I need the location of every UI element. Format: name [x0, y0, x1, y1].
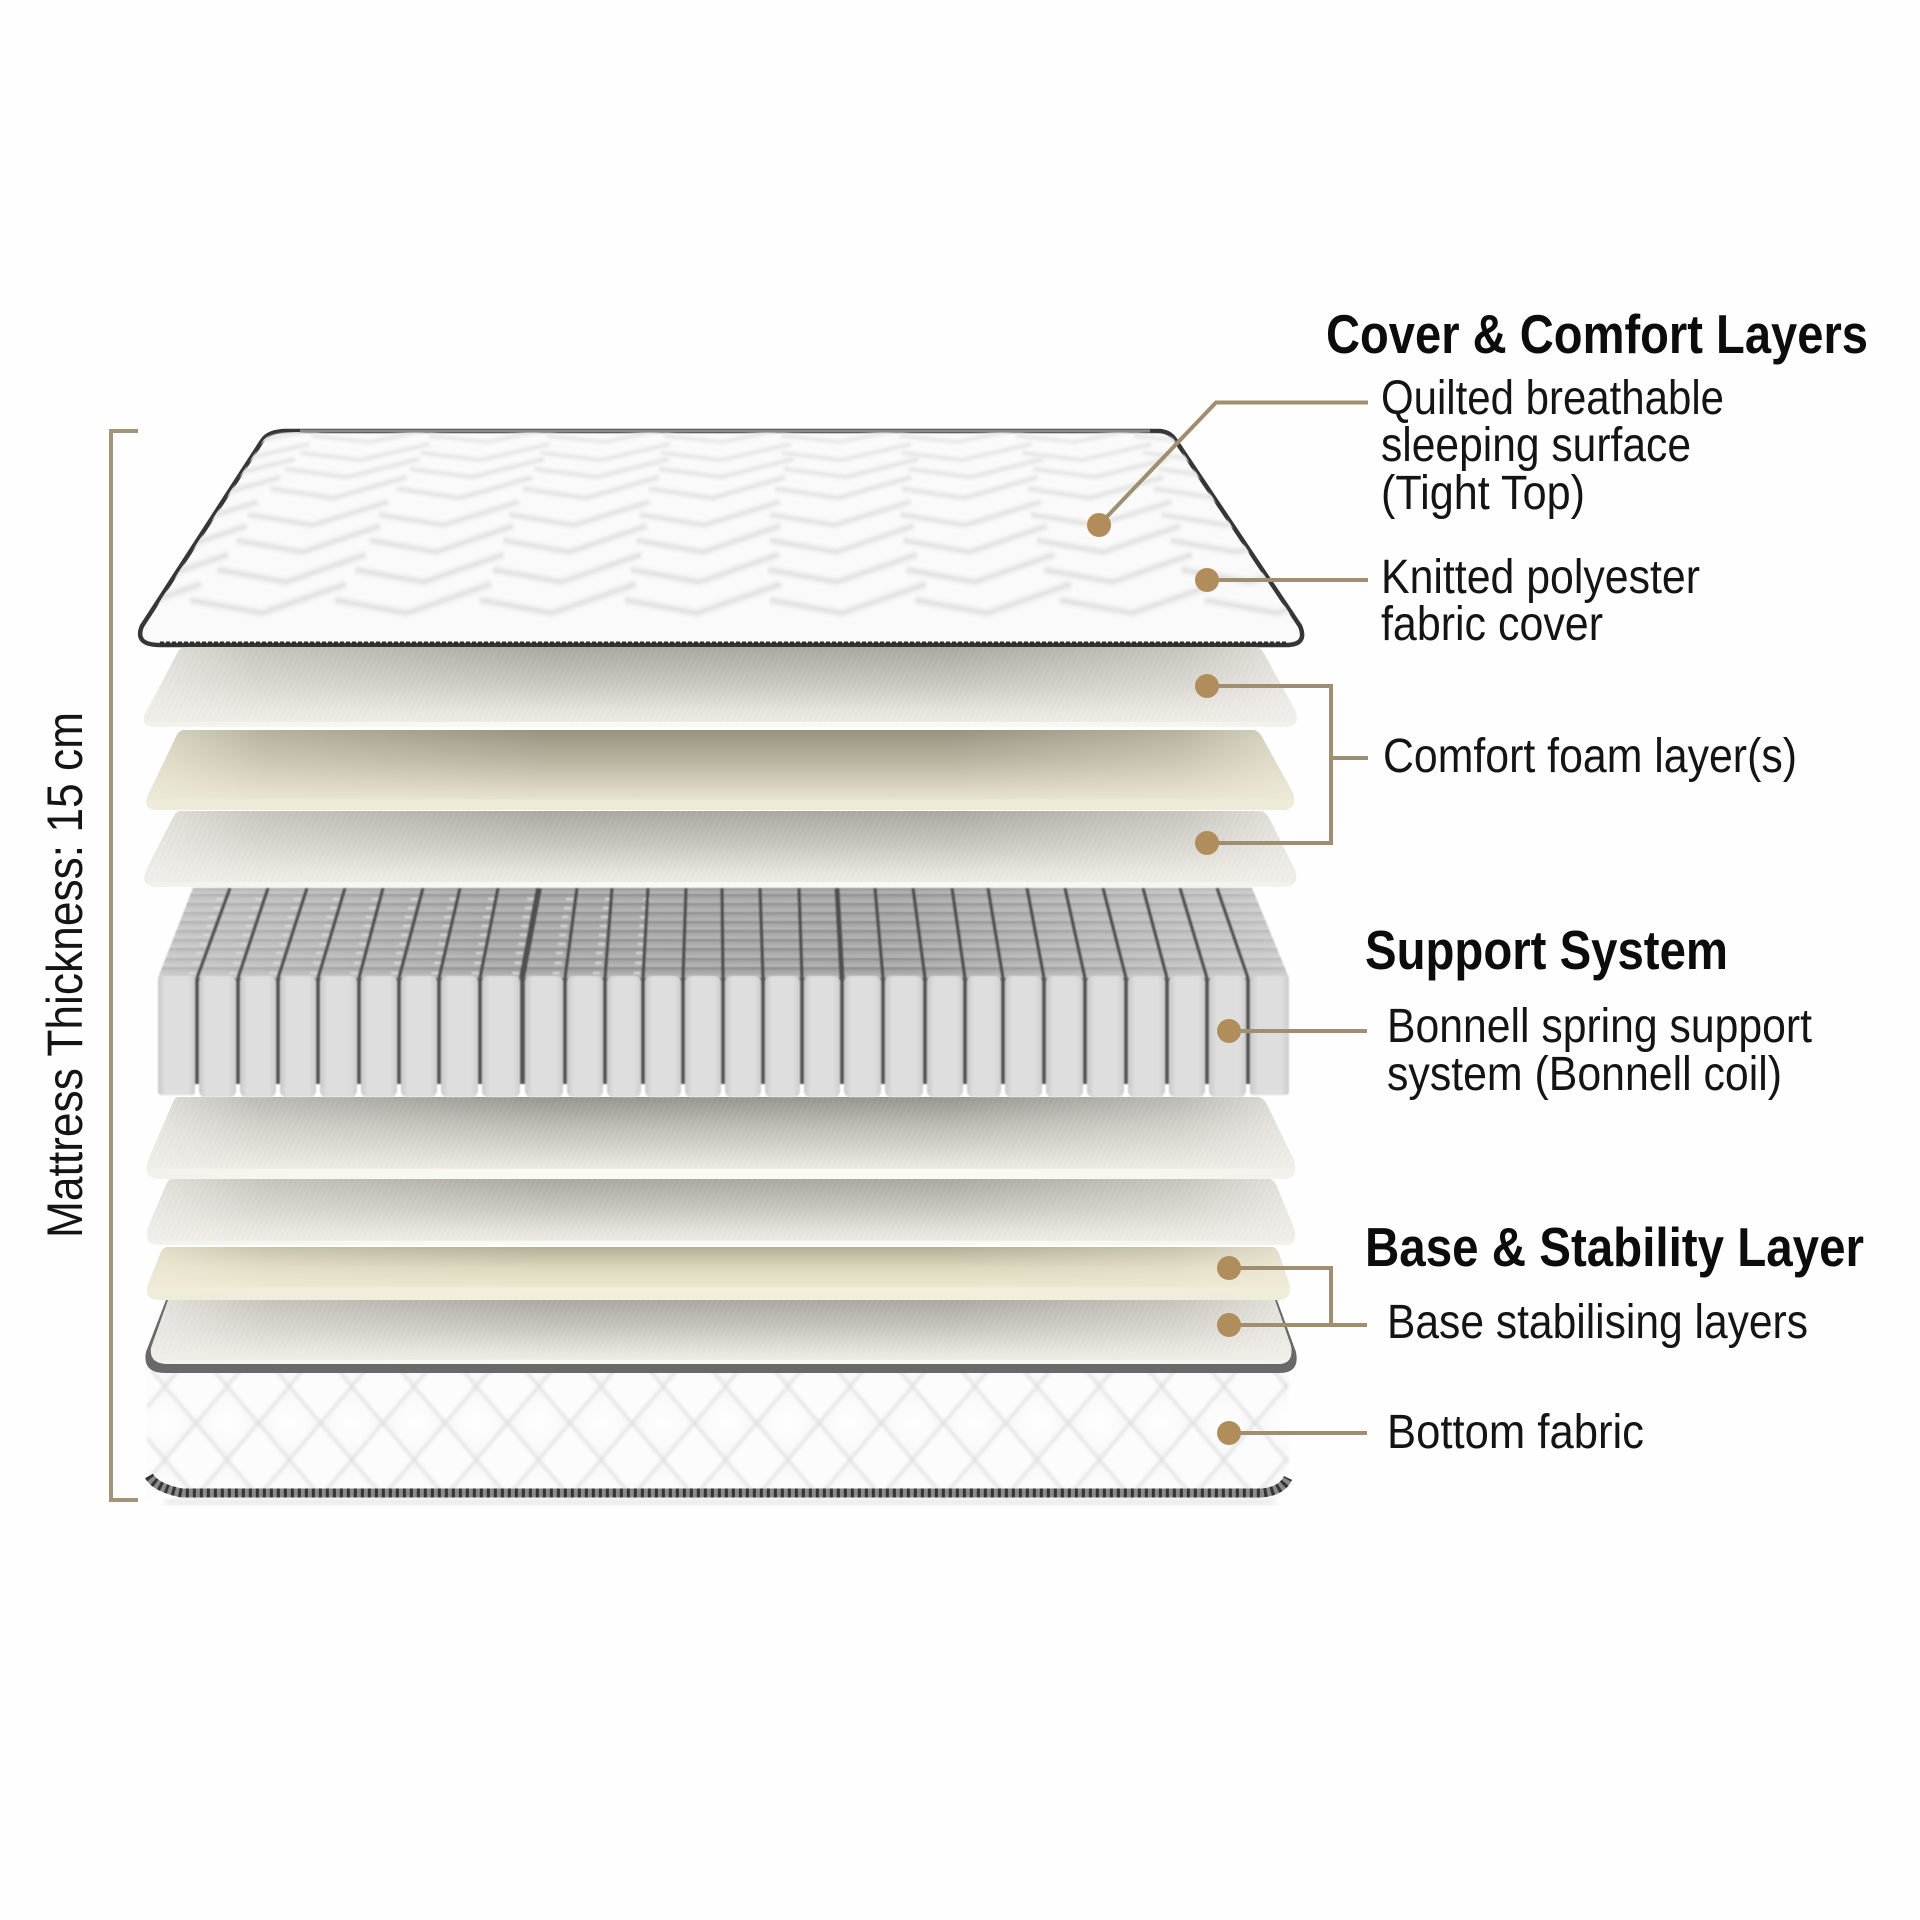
callout: knitted cover: Knitted polyester	[1381, 551, 1700, 604]
top edge piping	[300, 430, 1150, 432]
thickness label: Mattress Thickness: 15 cm	[37, 712, 93, 1238]
spring top rows	[150, 888, 1300, 978]
callout: base stabilising layers	[1217, 1256, 1808, 1349]
layer: quilted top cover	[138, 428, 1304, 648]
chevron quilting pattern	[156, 432, 1291, 616]
callout: knitted cover: fabric cover	[1381, 598, 1603, 651]
callout: spring system	[1217, 1000, 1812, 1101]
cover seam	[160, 642, 1286, 646]
spring front gaps	[160, 978, 1287, 1084]
callout: bottom fabric	[1217, 1406, 1644, 1459]
layer: knit layer 4	[147, 1179, 1295, 1245]
layer: cream foam 2	[147, 1247, 1290, 1300]
spring front pocket blocks	[158, 976, 1289, 1097]
callout: spring system: system (Bonnell coil)	[1387, 1048, 1782, 1101]
callout: quilted surface: sleeping surface	[1381, 419, 1691, 472]
layer: cream foam 1	[146, 730, 1294, 810]
layer: base knit layer with grey piping	[145, 1300, 1297, 1373]
layer: knit layer 1	[144, 647, 1297, 727]
base shadow	[165, 1500, 1275, 1504]
callout: base stabilising layers: Base stabilising layers	[1387, 1296, 1808, 1349]
callout: comfort foam: Comfort foam layer(s)	[1383, 730, 1797, 783]
callout: quilted surface: Quilted breathable	[1381, 372, 1724, 425]
layer: knit layer 3	[146, 1097, 1295, 1179]
callout: spring system: Bonnell spring support	[1387, 1000, 1812, 1053]
mattress exploded illustration	[45, 428, 1361, 1504]
heading: support system: Support System	[1365, 919, 1728, 981]
thickness bracket	[37, 431, 138, 1500]
callout: comfort foam	[1195, 674, 1797, 855]
base side panel with diamond quilting	[147, 1370, 1288, 1504]
callout: quilted surface	[1087, 372, 1724, 537]
callout: knitted cover	[1195, 551, 1700, 651]
base seam	[149, 1476, 1288, 1493]
callout: bottom fabric: Bottom fabric	[1387, 1406, 1644, 1459]
callout: quilted surface: (Tight Top)	[1381, 467, 1585, 520]
spring support unit	[150, 888, 1300, 1097]
layer: knit layer 2	[144, 811, 1296, 887]
